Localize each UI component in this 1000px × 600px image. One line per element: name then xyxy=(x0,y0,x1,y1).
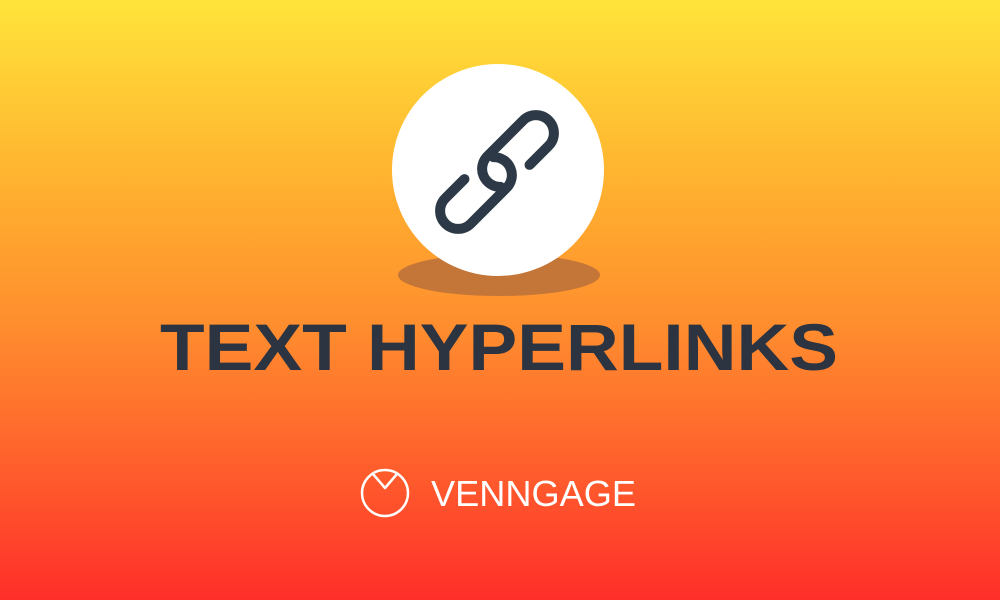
icon: chain links xyxy=(433,108,561,236)
icon: circle shadow xyxy=(398,254,600,296)
icon: link badge xyxy=(392,64,604,276)
logo text: VENNGAGE xyxy=(431,473,636,514)
logo xyxy=(362,470,636,516)
title: TEXT HYPERLINKS xyxy=(160,310,838,384)
icon: venngage logo xyxy=(362,470,408,516)
